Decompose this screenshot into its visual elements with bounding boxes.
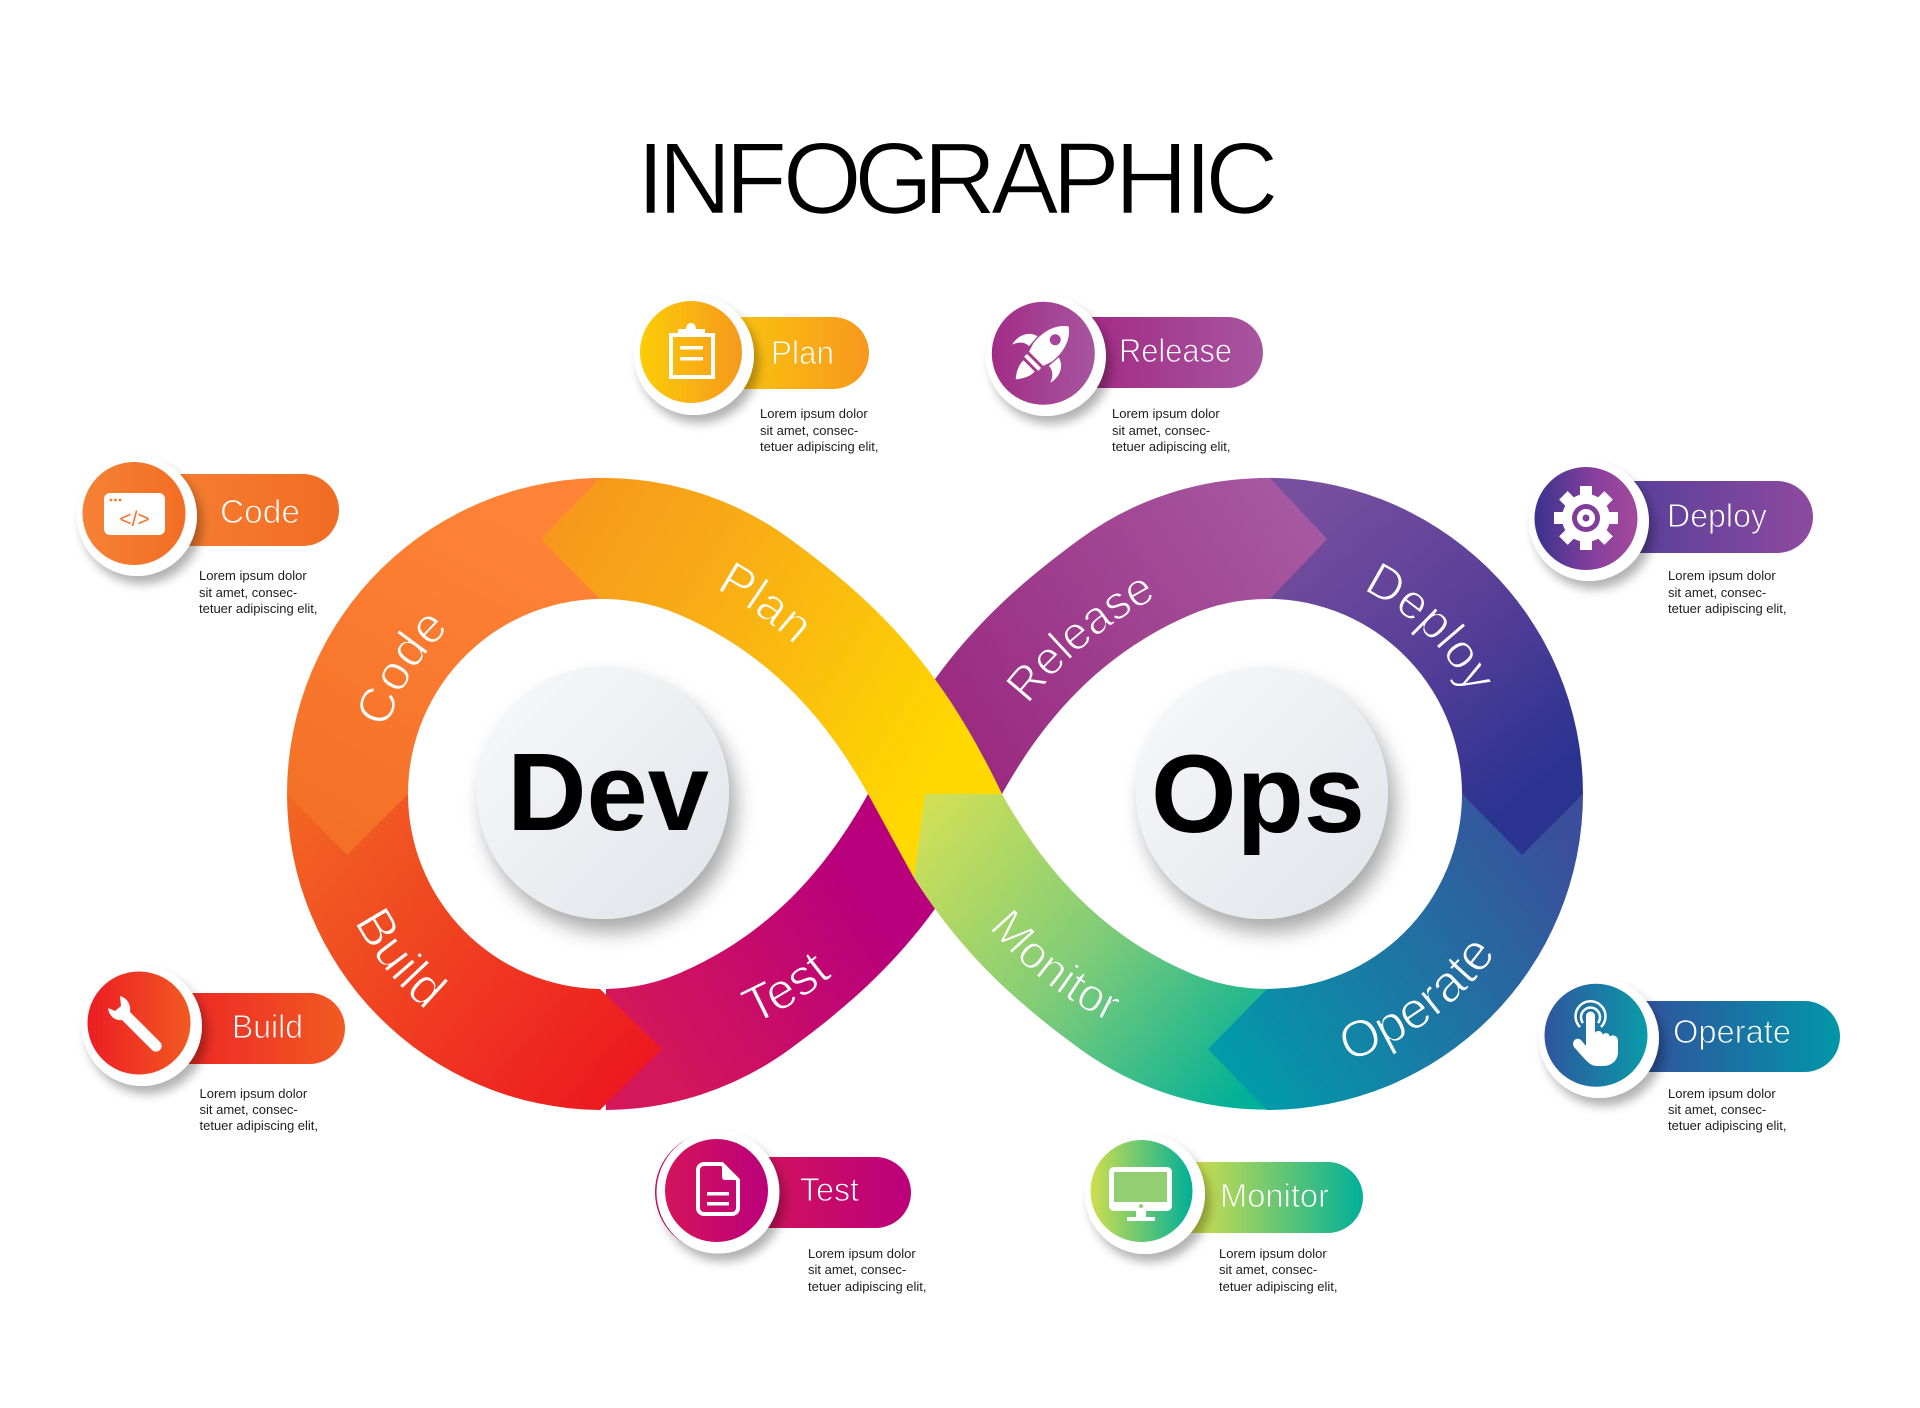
center disc: Dev [477,667,729,919]
pill [716,1157,911,1228]
icon: computer monitor [1109,1167,1172,1221]
icon: document [698,1164,738,1214]
description: sit amet, consec- [1668,1102,1766,1117]
callout: Plan [634,295,879,454]
pill [135,474,339,546]
callout: Release [986,296,1263,454]
infinity loop diagram [287,478,1583,1110]
description: tetuer adipiscing elit, [1219,1279,1338,1294]
description: Lorem ipsum dolor [199,568,307,583]
segment: Test [606,794,1002,1110]
description: sit amet, consec- [1668,585,1766,600]
badge [1090,1140,1192,1242]
callout: Build [82,966,345,1133]
description: tetuer adipiscing elit, [199,601,318,616]
description: sit amet, consec- [200,1102,298,1117]
ring label: Deploy: Deploy [1366,563,1491,686]
pill [1142,1162,1363,1233]
ring label: Code: Code [360,616,444,722]
description: Lorem ipsum dolor [1668,568,1776,583]
badge rim [634,295,754,415]
pill [1596,1001,1840,1072]
description: sit amet, consec- [1219,1262,1317,1277]
callout: Code [77,456,339,616]
center disc: Ops [1136,667,1388,919]
pill label: Build [232,1008,303,1045]
description: tetuer adipiscing elit, [808,1279,927,1294]
description: tetuer adipiscing elit, [1668,1118,1787,1133]
segment: Operate [1208,794,1583,1110]
segment: Code [287,478,610,855]
ring label: Monitor: Monitor [992,910,1120,1018]
description: sit amet, consec- [808,1262,906,1277]
badge rim [986,296,1106,416]
pill [1043,317,1263,388]
pill label: Test [800,1171,859,1208]
description: Lorem ipsum dolor [808,1246,916,1261]
pill label: Monitor [1220,1177,1329,1214]
icon: touch hand [1573,1001,1618,1066]
description: Lorem ipsum dolor [1219,1246,1327,1261]
badge [88,972,190,1074]
center disc: Dev: Dev [507,731,709,854]
segment: Build [287,794,662,1110]
center disc: Ops: Ops [1151,733,1365,856]
segment: Release [868,478,1327,794]
badge [82,462,186,565]
description: Lorem ipsum dolor [1112,406,1220,421]
icon: rocket [996,307,1088,399]
icon: wrench [108,996,162,1052]
description: sit amet, consec- [199,585,297,600]
pill label: Plan [771,334,834,371]
ring label: Operate: Operate [1342,943,1491,1056]
pill label: Operate [1673,1013,1791,1050]
pill label: Release [1119,332,1232,369]
description: Lorem ipsum dolor [200,1086,308,1101]
badge rim [656,1130,780,1254]
ring label: Release: Release [1006,580,1152,702]
ring label: Plan: Plan [720,562,806,642]
badge [1544,984,1648,1087]
ring label: Build: Build [356,908,448,1008]
badge [1534,467,1638,570]
description: Lorem ipsum dolor [760,406,868,421]
ring label: Test: Test [740,954,832,1018]
badge rim [1085,1134,1205,1254]
title: INFOGRAPHIC [636,122,1279,236]
callout: Monitor [1085,1134,1363,1294]
callout: Test [655,1130,927,1294]
description: sit amet, consec- [1112,423,1210,438]
icon: clipboard [671,323,713,377]
segment: Deploy [1258,478,1583,857]
description: tetuer adipiscing elit, [760,439,879,454]
backing sliver [655,1132,775,1252]
pill label: Deploy [1667,497,1767,534]
description: Lorem ipsum dolor [1668,1086,1776,1101]
badge [640,301,742,403]
icon: code window: </> [119,508,150,531]
description: sit amet, consec- [760,423,858,438]
badge rim [82,966,202,1086]
icon: gear [1554,486,1618,550]
pill [1586,481,1813,553]
pill [691,317,869,389]
badge [992,302,1095,405]
pill label: Code [220,493,300,530]
badge rim [77,456,197,576]
callout: Deploy [1529,461,1813,616]
callout: Operate [1539,978,1840,1133]
icon: code window [104,493,165,535]
description: tetuer adipiscing elit, [1668,601,1787,616]
segment: Plan [541,478,1002,885]
description: tetuer adipiscing elit, [200,1118,318,1133]
description: tetuer adipiscing elit, [1112,439,1231,454]
badge [665,1139,768,1242]
badge rim [1529,461,1649,581]
pill [139,993,345,1064]
segment: Monitor [914,794,1285,1110]
badge rim [1539,978,1659,1098]
